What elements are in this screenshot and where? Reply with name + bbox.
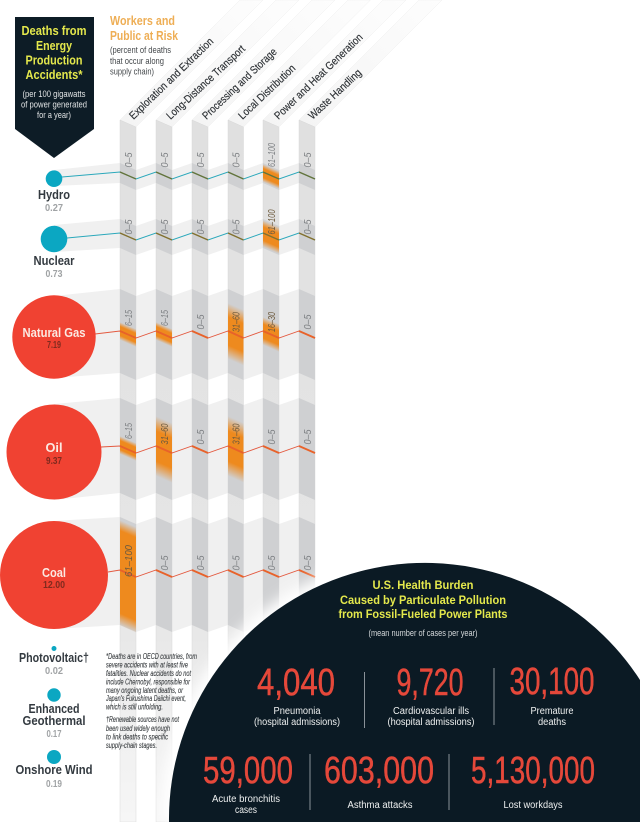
range labels: 0–5 bbox=[267, 555, 278, 570]
zigzag connector lines bbox=[62, 172, 315, 577]
column header labels bbox=[127, 32, 365, 122]
panel background circle bbox=[169, 563, 640, 822]
stat: premature deaths bbox=[510, 661, 594, 728]
range labels: 6–15 bbox=[160, 310, 171, 326]
energy source: hydro: Hydro bbox=[38, 188, 70, 202]
footnotes: fatalities. Nuclear accidents do not bbox=[106, 669, 191, 678]
energy source: enhanced geothermal: Geothermal bbox=[22, 714, 86, 728]
panel heading: Caused by Particulate Pollution bbox=[340, 595, 506, 607]
stat: acute bronchitis: cases bbox=[235, 805, 257, 816]
energy source: onshore wind: Onshore Wind bbox=[16, 763, 92, 777]
energy source: enhanced geothermal: Enhanced bbox=[28, 702, 80, 716]
energy source: enhanced geothermal bbox=[22, 688, 86, 740]
stat: lost workdays bbox=[471, 750, 595, 811]
range labels: 61–100 bbox=[124, 545, 135, 577]
white halo around health panel bbox=[161, 555, 640, 822]
energy source: photovoltaic: 0.02 bbox=[45, 665, 63, 677]
footnotes: supply-chain stages. bbox=[106, 741, 157, 750]
energy source: oil: 9.37 bbox=[46, 456, 62, 467]
energy source: natural gas bbox=[12, 295, 96, 379]
footnotes: †Renewable sources have not bbox=[106, 715, 179, 724]
column header labels: Long-Distance Transport bbox=[164, 43, 248, 122]
heading: workers and public at risk: that occur along bbox=[110, 56, 164, 67]
range labels: 0–5 bbox=[196, 152, 207, 168]
stat: asthma attacks bbox=[324, 750, 434, 811]
range labels: 0–5 bbox=[303, 555, 314, 570]
title panel: deaths from energy production accidents: (per 100 gigawatts bbox=[22, 89, 86, 100]
stat: premature deaths: 30,100 bbox=[510, 661, 594, 703]
range labels: 0–5 bbox=[160, 555, 171, 570]
footnotes: include Chernobyl, responsible for bbox=[106, 678, 190, 686]
footnotes: *Deaths are in OECD countries, from bbox=[106, 652, 197, 661]
stat: cardiovascular ills: Cardiovascular ills bbox=[393, 706, 469, 717]
orange risk highlights bbox=[120, 164, 279, 633]
range labels: 0–5 bbox=[303, 219, 314, 234]
energy source: onshore wind: 0.19 bbox=[46, 778, 62, 790]
heading: workers and public at risk bbox=[110, 13, 179, 78]
energy source: coal: Coal bbox=[42, 566, 66, 580]
panel heading: from Fossil-Fueled Power Plants bbox=[338, 609, 508, 621]
range labels: 0–5 bbox=[232, 555, 242, 570]
range labels: 0–5 bbox=[303, 314, 314, 330]
title panel: deaths from energy production accidents: Energy bbox=[36, 39, 72, 53]
light row bands connecting circles across columns bbox=[54, 163, 315, 632]
range labels: 6–15 bbox=[124, 310, 135, 326]
energy source: oil: Oil bbox=[46, 441, 62, 455]
energy source: natural gas: Natural Gas bbox=[22, 326, 86, 340]
range labels: 31–60 bbox=[160, 423, 171, 444]
title panel: deaths from energy production accidents: Production bbox=[26, 54, 82, 68]
range labels: 0–5 bbox=[160, 219, 171, 234]
title panel: deaths from energy production accidents: Accidents* bbox=[26, 68, 83, 82]
stat: cardiovascular ills bbox=[388, 662, 474, 728]
title panel: deaths from energy production accidents: of power generated bbox=[21, 100, 87, 110]
range labels: 0–5 bbox=[232, 219, 242, 234]
stat: lost workdays: Lost workdays bbox=[504, 800, 562, 811]
vertical columns bbox=[120, 120, 315, 822]
range labels: 31–60 bbox=[232, 312, 242, 332]
footnotes: severe accidents with at least five bbox=[106, 660, 188, 670]
panel heading bbox=[338, 580, 508, 638]
range labels: 61–100 bbox=[267, 209, 278, 234]
footnotes: Japan's Fukushima Daiichi event, bbox=[105, 694, 186, 703]
heading: workers and public at risk: Workers and bbox=[110, 13, 175, 28]
range labels: 0–5 bbox=[196, 555, 207, 570]
range labels: 31–60 bbox=[232, 423, 242, 444]
heading: workers and public at risk: Public at Risk bbox=[110, 28, 179, 43]
column header labels: Waste Handling bbox=[306, 67, 364, 122]
footnotes: many ongoing latent deaths, or bbox=[106, 686, 183, 695]
energy source: nuclear: Nuclear bbox=[34, 254, 75, 268]
title panel: deaths from energy production accidents bbox=[15, 17, 94, 158]
stat: pneumonia: 4,040 bbox=[257, 662, 335, 704]
range labels: 0–5 bbox=[196, 219, 207, 234]
panel heading: U.S. Health Burden bbox=[372, 580, 474, 592]
range labels: 0–5 bbox=[160, 152, 171, 168]
column header labels: Local Distribution bbox=[236, 63, 298, 122]
column header labels: Power and Heat Generation bbox=[272, 32, 365, 122]
stat: cardiovascular ills: 9,720 bbox=[396, 662, 464, 704]
column header labels: Processing and Storage bbox=[200, 46, 280, 122]
footnotes: been used widely enough bbox=[106, 724, 170, 733]
energy source: onshore wind bbox=[16, 750, 92, 790]
stat: pneumonia bbox=[254, 662, 340, 728]
range labels: 0–5 bbox=[303, 152, 314, 168]
footnotes bbox=[105, 652, 197, 750]
energy source: oil bbox=[6, 404, 102, 500]
range labels: 0–5 bbox=[124, 152, 135, 168]
range labels: 0–5 bbox=[232, 152, 242, 168]
energy source: natural gas: 7.19 bbox=[47, 340, 61, 351]
stat: asthma attacks: Asthma attacks bbox=[348, 800, 412, 811]
stat: acute bronchitis bbox=[203, 750, 293, 816]
stat: lost workdays: 5,130,000 bbox=[471, 750, 595, 792]
range labels: 0–5 bbox=[196, 429, 207, 444]
stat: acute bronchitis: 59,000 bbox=[203, 750, 293, 792]
footnotes: to link deaths to specific bbox=[106, 732, 168, 742]
energy source: nuclear bbox=[34, 226, 75, 280]
heading: workers and public at risk: (percent of deaths bbox=[110, 45, 171, 56]
heading: workers and public at risk: supply chain) bbox=[110, 66, 154, 78]
range labels: 0–5 bbox=[196, 314, 207, 330]
range labels: 0–5 bbox=[267, 429, 278, 444]
title panel: deaths from energy production accidents: Deaths from bbox=[22, 24, 86, 38]
range labels: 61–100 bbox=[267, 143, 278, 167]
energy source: hydro: 0.27 bbox=[45, 202, 63, 214]
stat: premature deaths: deaths bbox=[538, 717, 566, 728]
energy source: photovoltaic bbox=[19, 646, 89, 677]
range labels: 16–30 bbox=[267, 312, 278, 332]
column header labels: Exploration and Extraction bbox=[127, 36, 216, 122]
stat: acute bronchitis: Acute bronchitis bbox=[212, 794, 280, 805]
energy source: photovoltaic: Photovoltaic† bbox=[19, 651, 89, 665]
footnotes: which is still unfolding. bbox=[106, 702, 163, 712]
range labels bbox=[124, 143, 314, 577]
title panel: deaths from energy production accidents: for a year) bbox=[37, 110, 71, 121]
stat: asthma attacks: 603,000 bbox=[324, 750, 434, 792]
energy source: coal bbox=[0, 521, 108, 629]
energy source: enhanced geothermal: 0.17 bbox=[46, 728, 62, 740]
darker row bands on columns bbox=[120, 163, 315, 632]
range labels: 6–15 bbox=[124, 423, 135, 439]
range labels: 0–5 bbox=[303, 429, 314, 444]
stat: cardiovascular ills: (hospital admissions) bbox=[388, 717, 474, 728]
stat: premature deaths: Premature bbox=[530, 706, 574, 717]
energy source: coal: 12.00 bbox=[43, 580, 65, 591]
energy source: nuclear: 0.73 bbox=[46, 268, 63, 280]
energy source: hydro bbox=[38, 170, 70, 214]
panel: U.S. health burden bbox=[169, 563, 640, 822]
stat: pneumonia: (hospital admissions) bbox=[254, 717, 340, 728]
stat: pneumonia: Pneumonia bbox=[274, 706, 321, 717]
panel heading: (mean number of cases per year) bbox=[368, 628, 478, 638]
range labels: 0–5 bbox=[124, 219, 135, 234]
diagonal column headers bbox=[120, 0, 442, 127]
